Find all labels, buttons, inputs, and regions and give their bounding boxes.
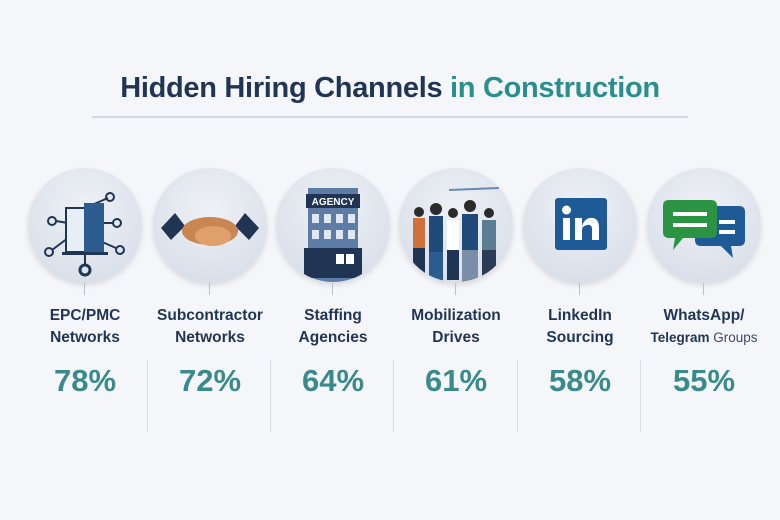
panel: Staffing Agencies: Staffing: [304, 307, 362, 324]
panel: Subcontractor: 72%: [179, 363, 241, 398]
icon: agency building: [276, 168, 390, 282]
panel: Staffing Agencies: [274, 168, 392, 398]
icon: chat bubbles: [647, 168, 761, 282]
icon: linkedin: [523, 168, 637, 282]
panel: Subcontractor: Networks: [175, 329, 245, 346]
panel: Mobilization: Mobilization: [411, 307, 501, 324]
panel: Mobilization: 61%: [425, 363, 487, 398]
panel: EPC/PMC: [26, 168, 144, 398]
icon: building network: [28, 168, 142, 282]
panel: WhatsApp/Telegram: Telegram Groups: [650, 330, 758, 345]
panel: WhatsApp/Telegram: 55%: [673, 363, 735, 398]
panel: LinkedIn: 58%: [549, 363, 611, 398]
panel: LinkedIn: Sourcing: [546, 329, 614, 346]
panel: Mobilization: [398, 168, 514, 398]
panel: WhatsApp/Telegram: WhatsApp/: [664, 307, 744, 324]
panel: Staffing Agencies: Agencies: [299, 329, 367, 346]
icon: group of workers: [399, 168, 513, 282]
panel: LinkedIn: LinkedIn: [548, 307, 612, 324]
panel: EPC/PMC: EPC/PMC: [50, 307, 120, 324]
panel: Mobilization: Drives: [432, 329, 480, 346]
panel: EPC/PMC: 78%: [54, 363, 116, 398]
icon: agency building: AGENCY: [312, 197, 355, 208]
panel: Subcontractor: Subcontractor: [157, 307, 263, 324]
panel: WhatsApp/Telegram: [646, 168, 762, 398]
panel: LinkedIn: [522, 168, 638, 398]
title: Hidden Hiring Channels in Construction: [120, 72, 660, 104]
panel: EPC/PMC: Networks: [50, 329, 120, 346]
icon: handshake: [153, 168, 267, 282]
panel: Staffing Agencies: 64%: [302, 363, 364, 398]
panel: Subcontractor: [152, 168, 268, 398]
